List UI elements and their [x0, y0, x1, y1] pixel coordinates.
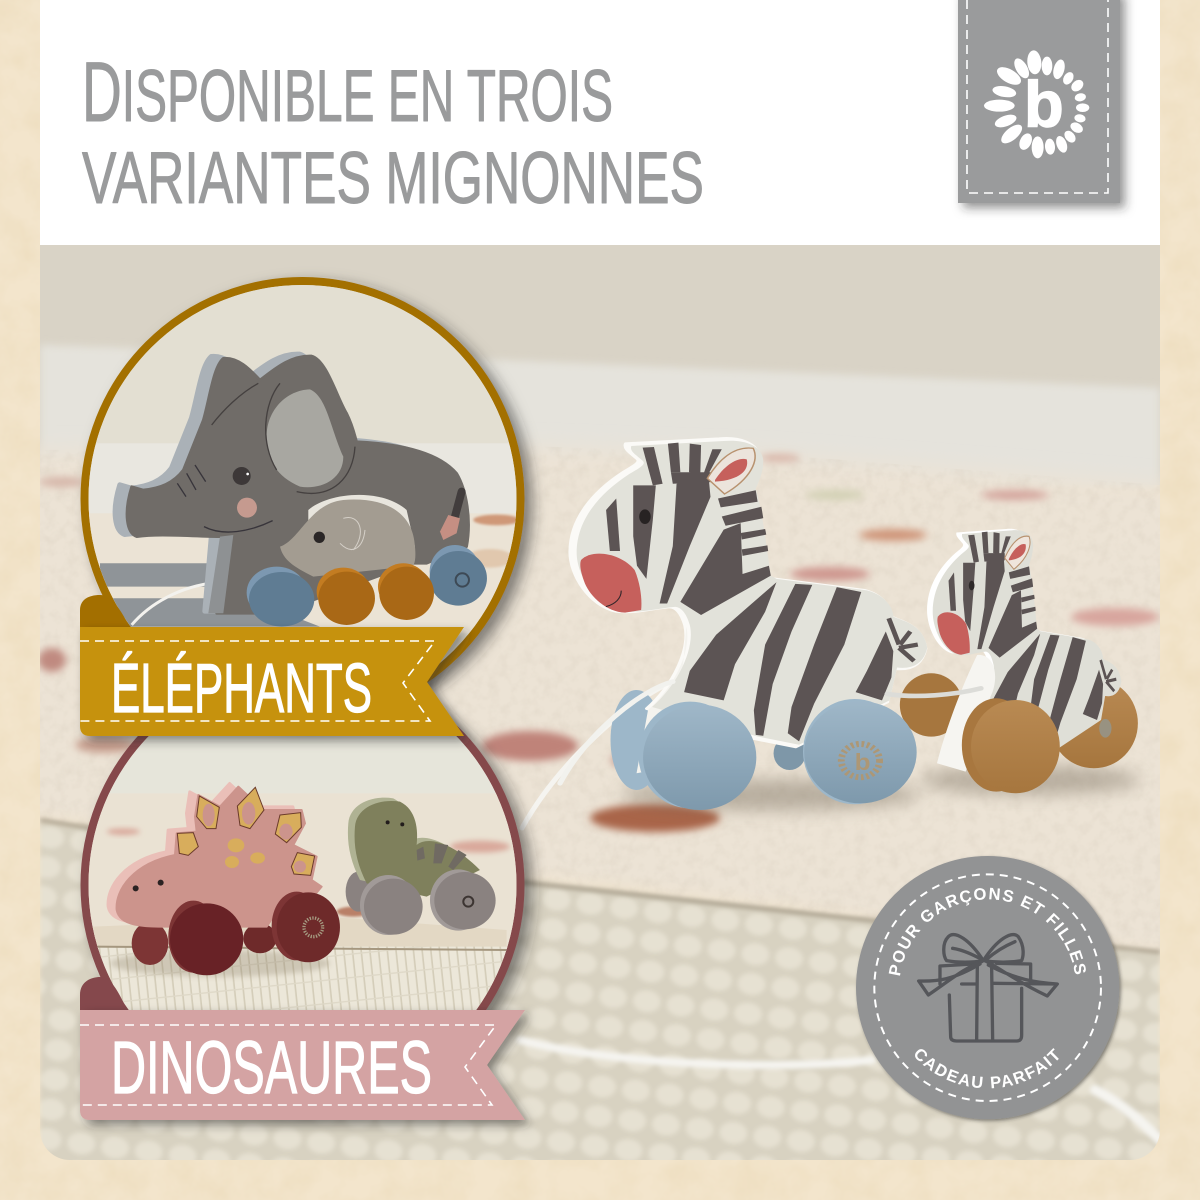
elephant photo [88, 285, 516, 634]
title line 1: DISPONIBLE EN TROIS [82, 45, 613, 139]
elephant string [132, 583, 215, 625]
elephant wheels [247, 545, 487, 627]
ribbon fold [80, 595, 130, 628]
big zebra front wheels [638, 699, 917, 810]
rug seam [40, 820, 1160, 952]
elephant ring [84, 281, 520, 717]
header: white band [40, 0, 1160, 245]
title [82, 45, 704, 219]
zebra eye [639, 509, 651, 524]
panel: photo background [20, 245, 1180, 1170]
rug fuzz texture [46, 460, 1126, 930]
string between zebras [887, 688, 981, 696]
string to left [560, 682, 673, 783]
ribbon banner [80, 1010, 525, 1120]
ribbon label: DINOSAURES [111, 1026, 432, 1109]
icon: green dinosaur [346, 798, 496, 935]
panel: elephants circle [60, 270, 540, 717]
ribbon: dinosaures [80, 977, 525, 1120]
icon: big elephant [115, 354, 469, 613]
ribbon banner [80, 627, 464, 736]
ribbon fold [80, 977, 128, 1012]
small zebra front wheel [962, 698, 1060, 793]
toy: zebra family [560, 438, 1138, 810]
small zebra white leg [937, 655, 995, 772]
big zebra back wheels [611, 690, 806, 790]
panel: dinosaurs circle [78, 700, 542, 1121]
dinosaur ring [84, 667, 520, 1103]
upper rug [20, 445, 1180, 960]
small zebra back wheels [900, 673, 1138, 768]
big zebra body [570, 438, 926, 747]
big zebra front wheels: b [855, 750, 871, 776]
brand logo [984, 50, 1089, 158]
badge disc [856, 856, 1119, 1119]
small zebra [927, 529, 1121, 752]
tag body [958, 0, 1120, 203]
badge text top: POUR GARÇONS ET FILLES [888, 888, 1086, 976]
brand tag [958, 0, 1120, 203]
lower ribbed rug [40, 822, 1160, 1170]
icon: gift box [919, 935, 1057, 1041]
pull strings [520, 682, 1160, 1140]
badge text bottom: CADEAU PARFAIT [915, 1048, 1059, 1088]
wall [40, 245, 1160, 485]
dinosaur photo [88, 736, 516, 1010]
ribbon label: ÉLÉPHANTS [111, 649, 372, 727]
ribbon: elephants [80, 595, 464, 736]
zebra snout [580, 554, 641, 613]
badge: perfect gift [856, 856, 1124, 1123]
ribbon stitches [80, 641, 435, 721]
icon: pink stegosaurus [108, 783, 340, 975]
contact shadows [620, 765, 1140, 811]
skirting board [40, 345, 1160, 490]
zebra ear [707, 448, 755, 494]
rug pattern patches [38, 454, 1159, 832]
title line 2: VARIANTES MIGNONNES [82, 138, 704, 219]
icon: baby elephant [280, 495, 415, 577]
ribbon stitches [80, 1025, 496, 1105]
brand logo: b [1024, 68, 1064, 141]
